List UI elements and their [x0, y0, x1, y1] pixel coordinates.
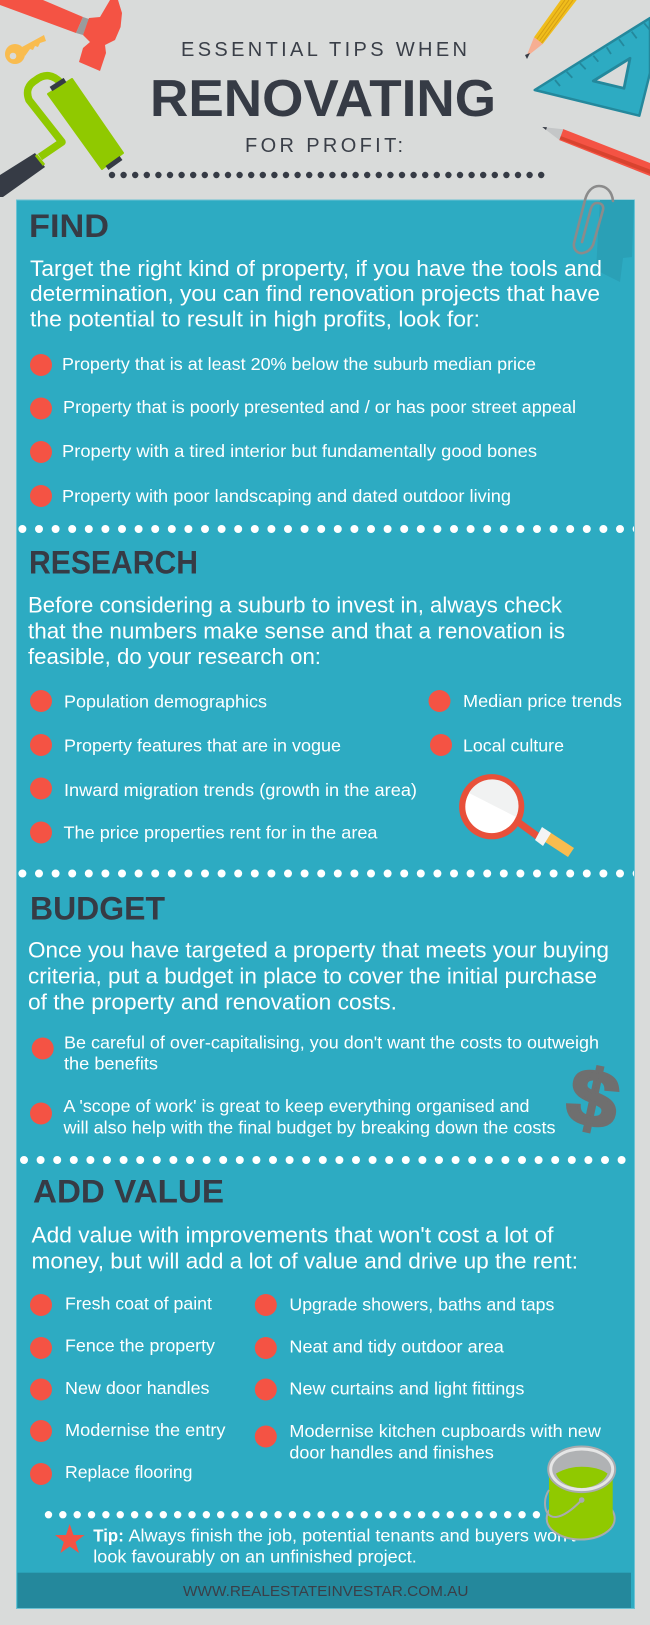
intro text: budget: [28, 938, 609, 1014]
bullet list: research left: Inward migration trends (growth in the area): [64, 780, 417, 800]
intro text: budget: criteria, put a budget in place to cover the initial purchase: [28, 964, 597, 988]
icon: star: [55, 1524, 84, 1553]
bullet list: add value right: [255, 1294, 601, 1462]
intro text: find: the potential to result in high profits, look for:: [30, 306, 480, 332]
bullet list: add value left: Replace flooring: [65, 1462, 192, 1482]
title line: renovating: RENOVATING: [150, 70, 496, 128]
section: budget: [28, 890, 627, 1147]
bullet list: research left: Population demographics: [64, 692, 267, 712]
bullet list: add value right: New curtains and light fittings: [289, 1378, 525, 1398]
icon: paperclip: [574, 186, 613, 253]
intro text: add value: [32, 1222, 578, 1274]
section: research: [28, 544, 622, 857]
bullet list: research right: Median price trends: [463, 691, 622, 711]
bullet list: research right: [428, 690, 622, 756]
heading: find: FIND: [29, 208, 109, 244]
callout: tip: [55, 1524, 576, 1566]
bullet list: add value right: Modernise kitchen cupboards with new: [289, 1421, 601, 1441]
heading: budget: BUDGET: [30, 890, 165, 926]
heading: research: RESEARCH: [29, 544, 198, 580]
bullet list: add value left: Modernise the entry: [65, 1420, 226, 1440]
bullet list: find: Property with a tired interior but fundamentally good bones: [62, 441, 537, 461]
icon: set square ruler: [535, 18, 650, 116]
title line: essential tips: ESSENTIAL TIPS WHEN: [181, 39, 467, 61]
intro text: budget: of the property and renovation costs.: [28, 990, 397, 1014]
bullet list: add value right: Upgrade showers, baths and taps: [289, 1294, 555, 1314]
bullet list: budget: will also help with the final budget by breaking down the costs: [62, 1118, 556, 1138]
intro text: research: that the numbers make sense and that a renovation is: [28, 618, 565, 644]
bullet list: find: [30, 354, 576, 507]
bullet list: budget: the benefits: [64, 1054, 158, 1074]
tip text: Tip:: [93, 1526, 124, 1546]
icon: paper shadow fold: [596, 200, 634, 282]
bullet list: budget: A 'scope of work' is great to keep everything organised and: [64, 1096, 530, 1116]
icon: paint bucket: [545, 1446, 615, 1540]
bullet list: research left: [30, 690, 417, 844]
intro text: research: Before considering a suburb to invest in, always check: [28, 592, 563, 618]
intro text: find: determination, you can find renovation projects that have: [30, 281, 600, 306]
bullet list: budget: Be careful of over-capitalising, you don't want the costs to outweigh: [64, 1032, 599, 1052]
bullet list: budget: [30, 1032, 599, 1138]
bullet list: find: Property that is at least 20% below the suburb median price: [62, 354, 536, 374]
icon: magnifying glass: [459, 774, 574, 857]
dark dotted divider: [112, 172, 549, 178]
white dotted divider 2: [22, 870, 640, 878]
white dotted divider 1: [22, 525, 640, 533]
white dotted divider 3: [24, 1156, 640, 1164]
intro text: budget: Once you have targeted a property that meets your buying: [28, 938, 609, 962]
intro text: research: [28, 592, 565, 669]
bullet list: add value right: door handles and finishes: [289, 1442, 494, 1462]
bullet list: add value left: New door handles: [65, 1378, 210, 1398]
title: [150, 39, 496, 157]
heading: add value: ADD VALUE: [33, 1174, 224, 1210]
intro text: add value: Add value with improvements that won't cost a lot of: [32, 1222, 554, 1248]
tip text: [93, 1526, 576, 1566]
tip text: look favourably on an unfinished project.: [93, 1546, 417, 1566]
icon: key: [5, 35, 46, 64]
bullet list: add value left: Fence the property: [65, 1336, 215, 1356]
bullet list: find: Property with poor landscaping and dated outdoor living: [62, 486, 511, 506]
icon: yellow pencil: [525, 0, 577, 59]
section: find: [29, 208, 602, 507]
bullet list: research left: The price properties rent for in the area: [64, 822, 378, 842]
footer band: [18, 1573, 631, 1608]
icon: hammer: [0, 0, 122, 71]
footer url: WWW.REALESTATEINVESTAR.COM.AU: [183, 1584, 468, 1600]
bullet list: add value left: Fresh coat of paint: [65, 1294, 212, 1314]
intro text: find: [30, 256, 602, 332]
bullet list: research right: Local culture: [463, 736, 564, 756]
bullet list: add value right: Neat and tidy outdoor area: [289, 1336, 504, 1356]
tip text: Always finish the job, potential tenants and buyers won't: [128, 1526, 576, 1546]
white dotted divider: tip: [48, 1511, 548, 1518]
icon: dollar sign: $: [560, 1049, 627, 1147]
icon: paint roller: [0, 76, 123, 197]
section: add value: [30, 1174, 601, 1485]
bullet list: research left: Property features that are in vogue: [64, 736, 341, 756]
title line: for profit: FOR PROFIT:: [245, 135, 403, 157]
bullet list: add value left: [30, 1294, 226, 1485]
icon: red pencil: [542, 127, 650, 176]
bullet list: find: Property that is poorly presented and / or has poor street appeal: [63, 397, 576, 417]
intro text: research: feasible, do your research on:: [28, 644, 321, 669]
intro text: find: Target the right kind of property, if you have the tools and: [30, 256, 602, 281]
intro text: add value: money, but will add a lot of value and drive up the rent:: [32, 1248, 578, 1274]
